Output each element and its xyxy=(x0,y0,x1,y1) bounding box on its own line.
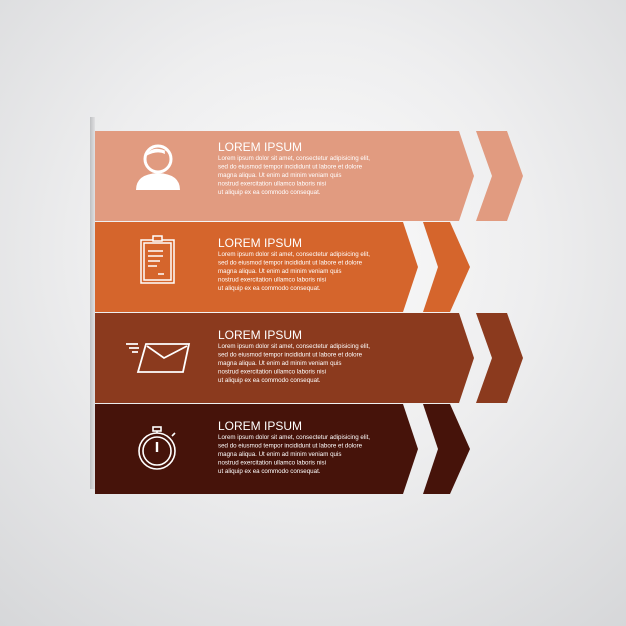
text 4: ut aliquip ex ea commodo consequat. xyxy=(218,468,321,475)
panel: step 4 xyxy=(95,404,470,494)
text 4: Lorem ipsum dolor sit amet, consectetur adipisicing elit, xyxy=(218,434,370,441)
icon: person xyxy=(136,146,180,190)
text 2: sed do eiusmod tempor incididunt ut labore et dolore xyxy=(218,260,363,266)
text 1: magna aliqua. Ut enim ad minim veniam quis xyxy=(218,172,341,179)
text 3: LOREM IPSUM xyxy=(218,328,302,342)
pole xyxy=(90,117,95,489)
text 1: Lorem ipsum dolor sit amet, consectetur adipisicing elit, xyxy=(218,155,370,162)
panel: step 2 xyxy=(95,222,470,312)
text 4: sed do eiusmod tempor incididunt ut labore et dolore xyxy=(218,442,363,450)
text 2: LOREM IPSUM xyxy=(218,236,302,250)
text 2 xyxy=(218,236,370,292)
icon: stopwatch xyxy=(139,427,175,469)
text 1: nostrud exercitation ullamco laboris nisi xyxy=(218,180,326,188)
text 3: magna aliqua. Ut enim ad minim veniam quis xyxy=(218,360,341,367)
text 3 xyxy=(218,328,370,384)
text 4 xyxy=(218,419,370,475)
text 4: LOREM IPSUM xyxy=(218,419,302,433)
text 1: LOREM IPSUM xyxy=(218,140,302,154)
text 1: ut aliquip ex ea commodo consequat. xyxy=(218,189,321,196)
text 2: ut aliquip ex ea commodo consequat. xyxy=(218,285,321,292)
panel: step 1 xyxy=(95,131,523,221)
chevron 4 xyxy=(423,404,470,494)
text 3: nostrud exercitation ullamco laboris nisi xyxy=(218,368,326,376)
icon: clipboard xyxy=(141,236,174,283)
text 1: sed do eiusmod tempor incididunt ut labore et dolore xyxy=(218,164,363,170)
chevron 2 xyxy=(423,222,470,312)
text 3: ut aliquip ex ea commodo consequat. xyxy=(218,377,321,384)
text 2: Lorem ipsum dolor sit amet, consectetur adipisicing elit, xyxy=(218,251,370,258)
text 4: magna aliqua. Ut enim ad minim veniam quis xyxy=(218,451,341,458)
text 3: sed do eiusmod tempor incididunt ut labore et dolore xyxy=(218,352,363,358)
text 3: Lorem ipsum dolor sit amet, consectetur adipisicing elit, xyxy=(218,343,370,350)
text 4: nostrud exercitation ullamco laboris nisi xyxy=(218,460,326,466)
chevron 3 xyxy=(476,313,523,403)
text 1 xyxy=(218,140,370,196)
text 2: nostrud exercitation ullamco laboris nisi xyxy=(218,276,326,284)
chevron 1 xyxy=(476,131,523,221)
panel: step 3 xyxy=(95,313,523,403)
icon: envelope xyxy=(126,344,189,372)
text 2: magna aliqua. Ut enim ad minim veniam quis xyxy=(218,268,341,275)
